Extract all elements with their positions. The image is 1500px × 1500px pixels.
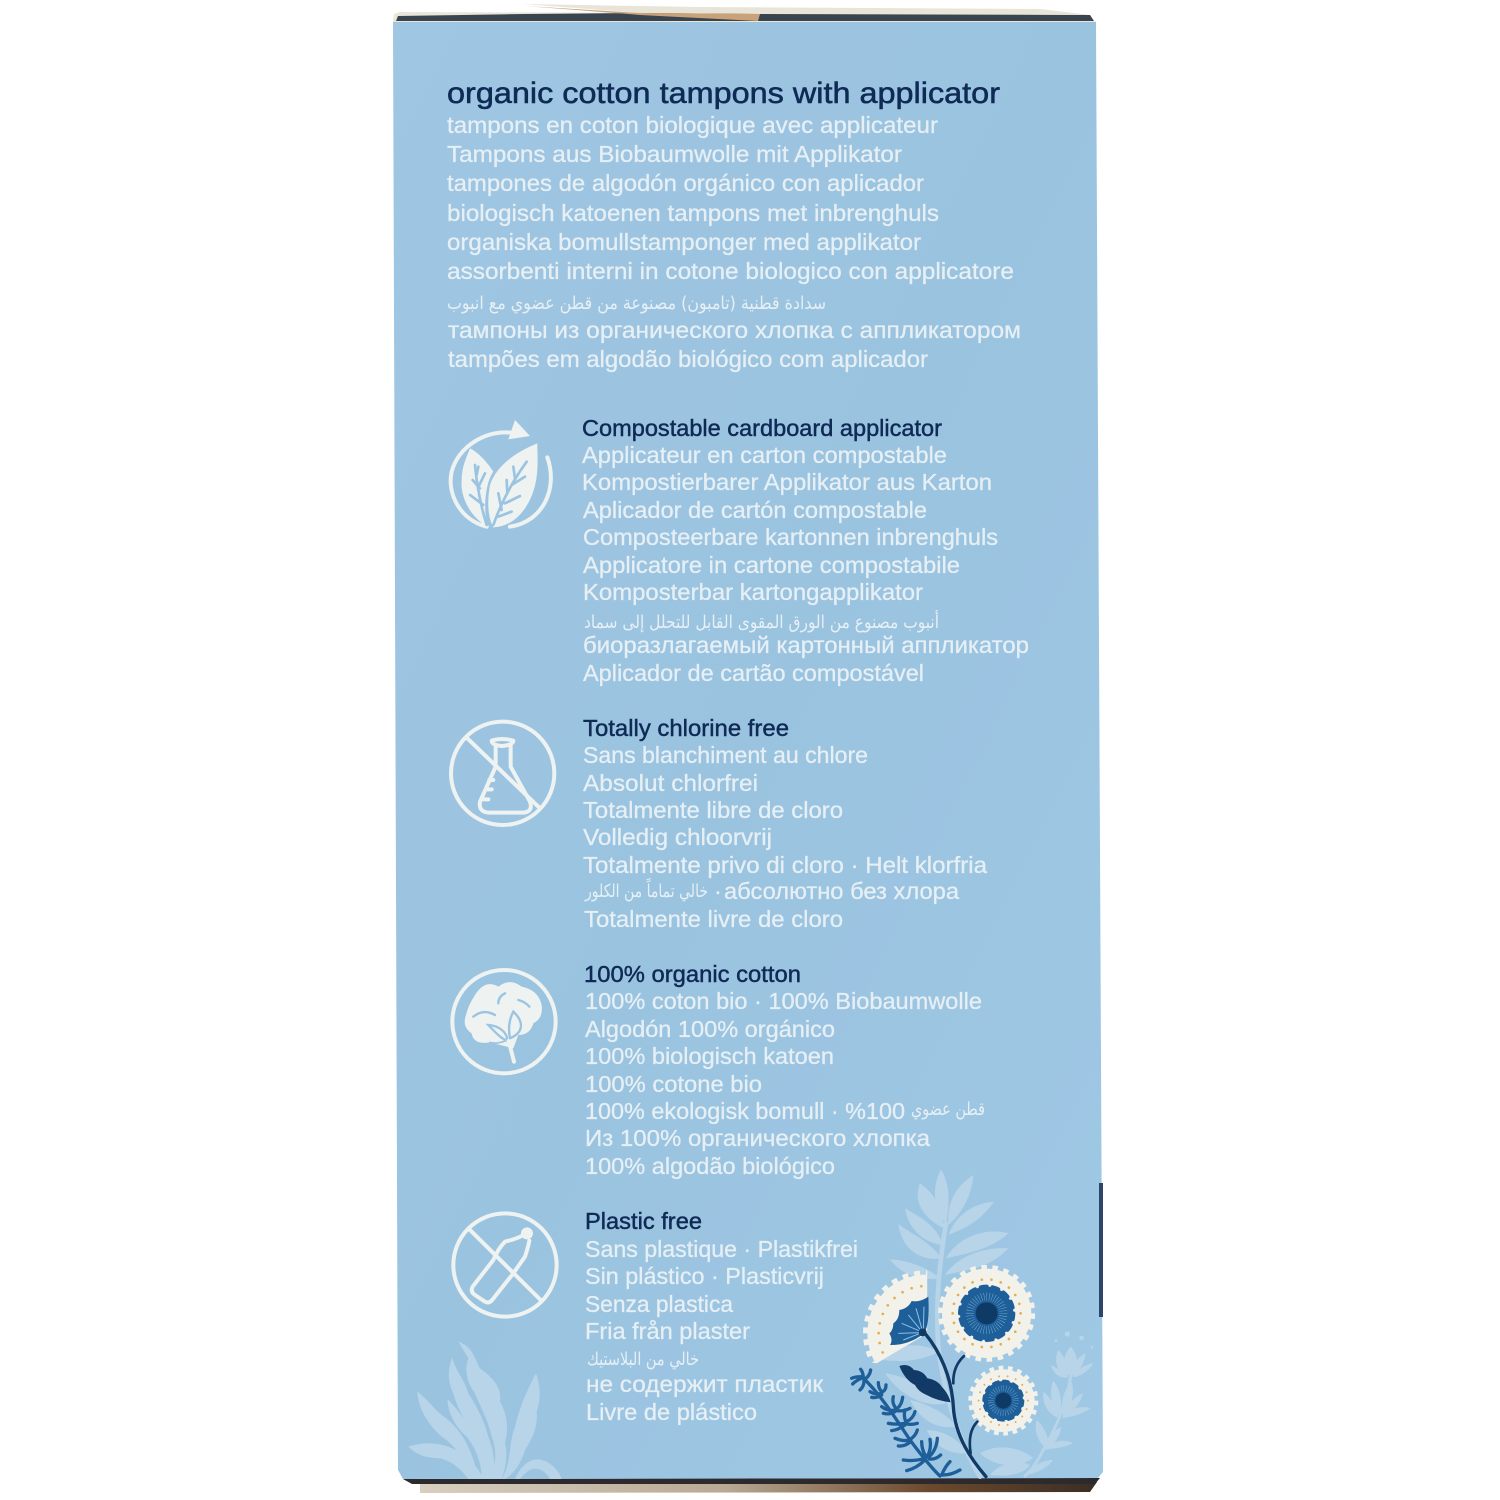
feature: totally chlorine free: Absolut chlorfrei [583, 770, 758, 796]
feature: totally chlorine free: Totalmente libre de cloro [583, 797, 843, 823]
floral decoration [852, 1169, 1093, 1477]
feature: totally chlorine free: · [714, 878, 722, 904]
feature: compostable applicator: Aplicador de cartón compostable [583, 497, 927, 523]
icon: compostable leaves [451, 420, 551, 527]
feature: totally chlorine free [583, 715, 988, 932]
box top edge with flap [393, 4, 1096, 22]
feature: plastic free: Plastic free [585, 1208, 702, 1234]
icon: cotton boll [452, 970, 556, 1073]
feature: compostable applicator: Aplicador de cartão compostável [583, 660, 924, 686]
feature: compostable applicator: Applicatore in cartone compostabile [583, 552, 960, 578]
translations: biologisch katoenen tampons met inbrenghuls [447, 200, 939, 226]
feature: plastic free: не содержит пластик [586, 1371, 824, 1397]
navy side strip [1099, 1183, 1103, 1317]
feature: 100% organic cotton: 100% cotone bio [585, 1071, 762, 1097]
feature: 100% organic cotton: 100% algodão biológico [585, 1153, 835, 1179]
translations [447, 112, 1021, 372]
translations: Tampons aus Biobaumwolle mit Applikator [447, 141, 902, 167]
sprig [852, 1369, 960, 1476]
feature: plastic free: Livre de plástico [586, 1399, 757, 1425]
feature: 100% organic cotton: Algodón 100% orgánico [585, 1016, 835, 1042]
icon: no plastic bottle [453, 1213, 557, 1317]
feature: totally chlorine free: خالي تماماً من الكلور [584, 878, 708, 902]
feature: 100% organic cotton [584, 961, 985, 1179]
feature: totally chlorine free: Totalmente livre de cloro [584, 906, 843, 932]
small flower [970, 1368, 1036, 1434]
feature: totally chlorine free: Totally chlorine free [583, 715, 789, 741]
feature: totally chlorine free: Volledig chloorvrij [583, 824, 772, 850]
half flower [863, 1270, 929, 1364]
large flower [940, 1267, 1033, 1360]
feature: 100% organic cotton: قطن عضوي [911, 1099, 985, 1120]
feature: compostable applicator: Compostable cardboard applicator [582, 415, 942, 441]
pale fern [873, 1169, 1033, 1477]
translations: organiska bomullstamponger med applikator [447, 229, 921, 255]
title: organic cotton tampons with applicator [447, 77, 1000, 110]
translations: тампоны из органического хлопка с аппликатором [448, 317, 1021, 343]
seaweed decoration [408, 1342, 562, 1479]
blue box panel [393, 22, 1103, 1479]
pale side plant [1025, 1331, 1093, 1476]
feature: totally chlorine free: Sans blanchiment au chlore [583, 742, 868, 768]
feature: totally chlorine free: абсолютно без хлора [724, 878, 960, 904]
feature: plastic free: خالي من البلاستيك [587, 1349, 699, 1370]
feature: plastic free: Sans plastique · Plastikfrei [585, 1236, 858, 1262]
icon: no chlorine flask [451, 722, 554, 825]
box bottom edge [403, 1478, 1100, 1493]
feature: 100% organic cotton: 100% coton bio · 100% Biobaumwolle [585, 988, 982, 1014]
feature: plastic free [585, 1208, 858, 1425]
translations: سدادة قطنية (تامبون) مصنوعة من قطن عضوي مع انبوب [447, 293, 826, 314]
translations: assorbenti interni in cotone biologico con applicatore [447, 258, 1014, 284]
feature: 100% organic cotton: Из 100% органического хлопка [585, 1125, 931, 1151]
feature: compostable applicator: أنبوب مصنوع من الورق المقوى القابل للتحلل إلى سماد [584, 610, 939, 633]
feature: plastic free: Fria från plaster [585, 1318, 750, 1344]
translations: tampões em algodão biológico com aplicador [448, 346, 928, 372]
feature: 100% organic cotton: 100% organic cotton [584, 961, 801, 987]
feature: compostable applicator [582, 415, 1029, 686]
stems and leaf [899, 1333, 986, 1477]
feature: plastic free: Senza plastica [585, 1291, 734, 1317]
feature: compostable applicator: Kompostierbarer Applikator aus Karton [582, 469, 992, 495]
feature: compostable applicator: Komposterbar kartongapplikator [583, 579, 923, 605]
feature: plastic free: Sin plástico · Plasticvrij [585, 1263, 824, 1289]
translations: tampones de algodón orgánico con aplicador [447, 170, 924, 196]
feature: totally chlorine free: Totalmente privo di cloro · Helt klorfria [583, 852, 988, 878]
feature: compostable applicator: Composteerbare kartonnen inbrenghuls [583, 524, 998, 550]
feature: 100% organic cotton: 100% biologisch katoen [585, 1043, 834, 1069]
main product title block [447, 77, 1021, 372]
feature: compostable applicator: Applicateur en carton compostable [582, 442, 947, 468]
feature: 100% organic cotton: 100% ekologisk bomull · %100 [585, 1098, 905, 1124]
feature: compostable applicator: биоразлагаемый картонный аппликатор [583, 632, 1029, 658]
translations: tampons en coton biologique avec applicateur [447, 112, 938, 138]
